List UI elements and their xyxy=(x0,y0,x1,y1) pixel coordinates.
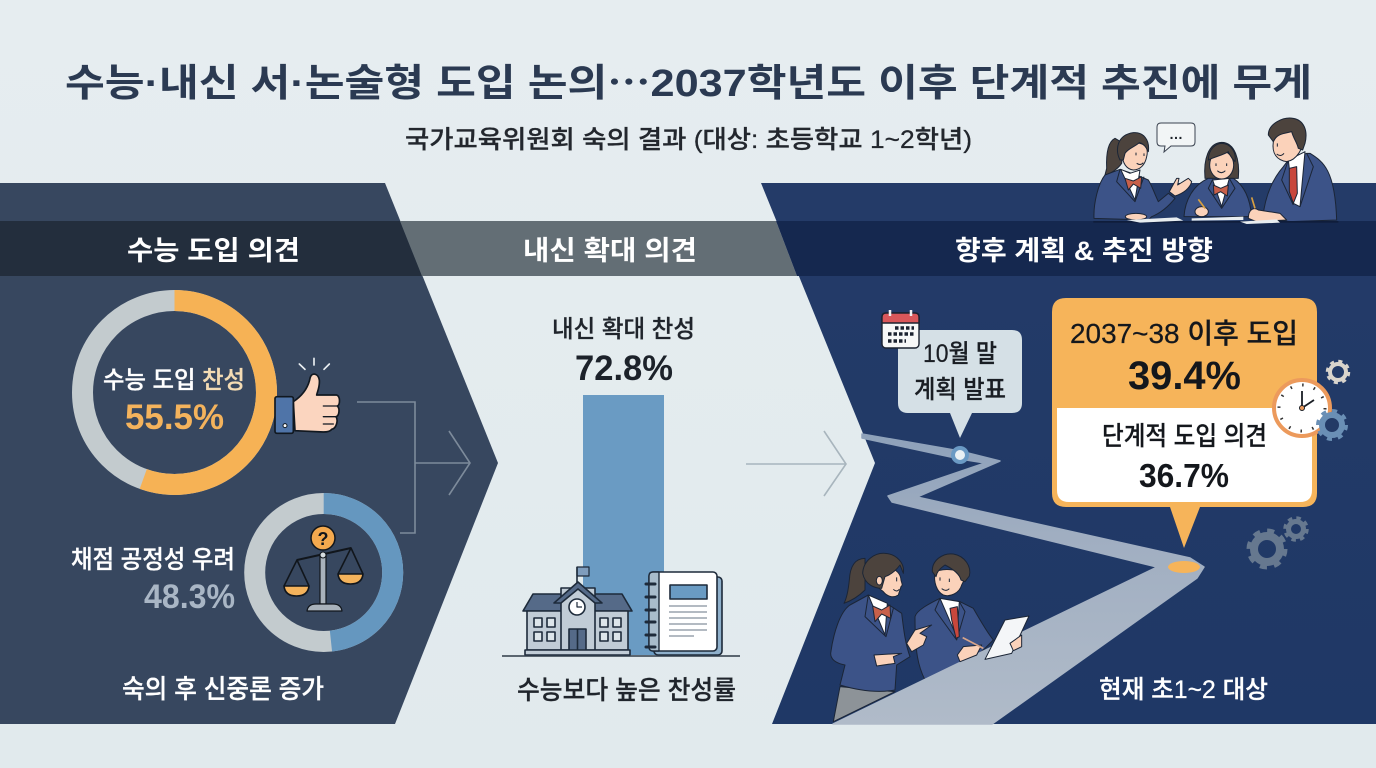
illustration: three students at table xyxy=(1093,118,1338,224)
header band: 향후 계획 & 추진 방향 xyxy=(776,221,1376,276)
callout: 2037~38 이후 도입 39.4% / 단계적 도입 의견 36.7%: 36.7% xyxy=(1139,457,1229,494)
illustration: tablet and hands xyxy=(874,616,1029,666)
callout: 2037~38 이후 도입 39.4% / 단계적 도입 의견 36.7%: 2037~38 이후 도입 xyxy=(1070,318,1298,349)
panel: 수능 도입 의견 xyxy=(0,183,498,724)
callout: 2037~38 이후 도입 39.4% / 단계적 도입 의견 36.7%: 39.4% xyxy=(1128,354,1241,398)
header band: 향후 계획 & 추진 방향: 향후 계획 & 추진 방향 xyxy=(955,236,1213,266)
subtitle: 국가교육위원회 숙의 결과 (대상: 초등학교 1~2학년) xyxy=(405,126,972,154)
speech bubble: ... xyxy=(1157,123,1195,152)
caption: 숙의 후 신중론 증가: 숙의 후 신중론 증가 xyxy=(122,674,324,704)
donut chart: 수능 도입 찬성 55.5% xyxy=(82,300,266,484)
connector arrow: middle panel xyxy=(746,431,846,496)
icon: decorative gears xyxy=(1249,518,1307,567)
speech bubble: ...: … xyxy=(1169,126,1183,142)
label: 내신 확대 찬성 72.8%: 72.8% xyxy=(575,349,673,388)
icon: school building xyxy=(523,567,632,655)
road path xyxy=(833,434,1204,724)
icon: scales with question mark: ? xyxy=(318,529,328,549)
callout: 2037~38 이후 도입 39.4% / 단계적 도입 의견 36.7% xyxy=(1052,298,1317,548)
student: boy right xyxy=(1248,118,1337,222)
icon: notebook xyxy=(646,572,722,655)
icon: clock with gears xyxy=(1274,362,1348,439)
caption: 수능보다 높은 찬성률: 수능보다 높은 찬성률 xyxy=(517,675,736,705)
speech bubble: 10월 말 계획 발표: 계획 발표 xyxy=(914,376,1006,404)
donut chart: 수능 도입 찬성 55.5%: 55.5% xyxy=(125,398,224,437)
header band: 수능 도입 의견: 수능 도입 의견 xyxy=(127,236,300,266)
label: 채점 공정성 우려 48.3%: 48.3% xyxy=(144,578,235,616)
student: girl with ponytail xyxy=(831,553,910,722)
table with papers xyxy=(1093,217,1338,224)
panel: 향후 계획 & 추진 방향 xyxy=(761,183,1376,724)
panel: 내신 확대 의견 xyxy=(400,221,846,705)
header band: 내신 확대 의견: 내신 확대 의견 xyxy=(523,236,697,266)
ground line xyxy=(502,655,740,657)
caption: 현재 초1~2 대상: 현재 초1~2 대상 xyxy=(1099,676,1268,704)
header band: 내신 확대 의견 xyxy=(400,221,797,276)
donut chart: 수능 도입 찬성 55.5%: 수능 도입 찬성 xyxy=(103,367,245,394)
donut chart: 채점 공정성 우려 48.3% xyxy=(255,504,393,642)
title: 수능·내신 서·논술형 도입 논의 …2037학년도 이후 단계적 추진에 무게 xyxy=(65,52,1312,107)
milestone marker: 10월 말 xyxy=(951,446,969,464)
bar chart: 72.8% xyxy=(583,395,664,656)
student: boy with tie xyxy=(915,554,993,680)
student: girl centre xyxy=(1184,142,1252,217)
label: 채점 공정성 우려 48.3%: 채점 공정성 우려 xyxy=(71,546,235,574)
icon: scales with question mark xyxy=(284,526,363,611)
speech bubble: 10월 말 계획 발표 xyxy=(898,330,1022,438)
label: 내신 확대 찬성 72.8% xyxy=(552,316,695,388)
illustration: two students with tablet xyxy=(831,553,993,722)
speech bubble: 10월 말 계획 발표: 10월 말 xyxy=(923,340,997,368)
connector arrow: left panel xyxy=(357,402,470,533)
student: girl left xyxy=(1094,133,1192,220)
icon: calendar xyxy=(882,310,919,348)
label: 내신 확대 찬성 72.8%: 내신 확대 찬성 xyxy=(552,316,695,343)
callout: 2037~38 이후 도입 39.4% / 단계적 도입 의견 36.7%: 단계적 도입 의견 xyxy=(1102,421,1267,451)
label: 채점 공정성 우려 48.3% xyxy=(71,546,235,616)
road end marker xyxy=(1168,561,1200,573)
icon: thumbs up xyxy=(275,358,339,433)
header band: 수능 도입 의견 xyxy=(0,221,422,276)
